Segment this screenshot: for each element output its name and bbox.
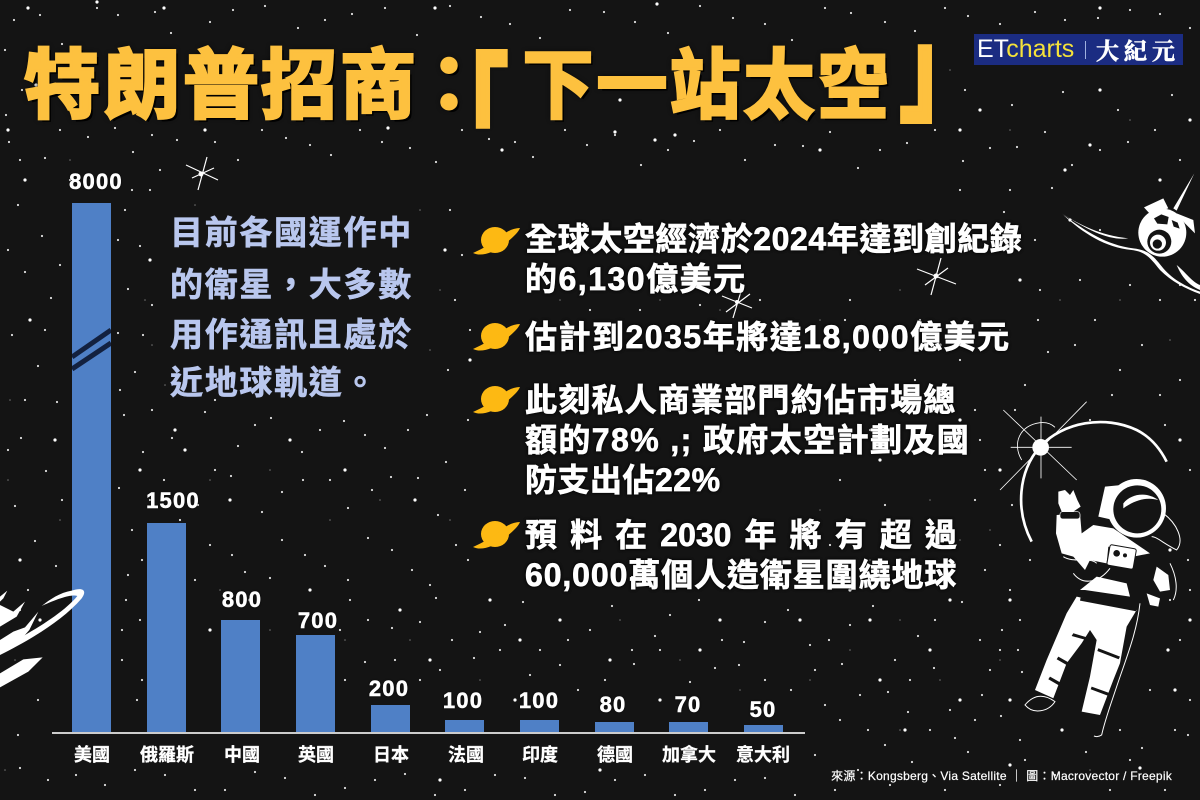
category labels: 日本	[373, 745, 409, 765]
title	[24, 7, 983, 175]
title: 」	[900, 7, 983, 135]
value labels: 50	[750, 697, 776, 722]
bullet text: market size 2024: 的6,130億美元	[525, 261, 747, 297]
category labels: 俄羅斯	[140, 745, 194, 765]
bullet text: private sector share: 此刻私人商業部門約佔市場總	[525, 382, 957, 418]
value labels: 8000	[69, 169, 123, 194]
bullet text: satellites by 2030: 60,000萬個人造衛星圍繞地球	[525, 557, 957, 593]
chart annotation text: 目前各國運作中	[170, 214, 413, 251]
bar chart: satellites by country	[52, 203, 805, 734]
title: 招	[261, 44, 337, 129]
logo: ET charts and Epoch Times	[974, 34, 1183, 65]
chart annotation text: 近地球軌道。	[170, 364, 378, 401]
logo: ET charts and Epoch Times: ETcharts	[977, 35, 1074, 63]
chart annotation text: 的衛星，大多數	[170, 266, 413, 303]
category labels: 法國	[448, 745, 484, 765]
chart annotation text: 用作通訊且處於	[170, 316, 413, 353]
value labels: 70	[675, 692, 701, 717]
value labels: 80	[600, 692, 626, 717]
bar: China 800	[221, 620, 260, 732]
bullet text: forecast 2035: 估計到2035年將達18,000億美元	[525, 319, 1011, 355]
bullet text: market size 2024	[525, 221, 1022, 297]
source credit: 來源：Kongsberg、Via Satellite ｜ 圖：Macrovector / Freepik	[831, 769, 1172, 783]
bullet text: private sector share: 額的78% ,; 政府太空計劃及國	[525, 422, 970, 458]
bar: Italy 50	[744, 725, 783, 732]
category labels: 中國	[224, 745, 260, 765]
category labels: 印度	[522, 745, 558, 765]
title: 站	[670, 44, 740, 129]
category labels: 加拿大	[662, 745, 716, 765]
bar: USA 8000	[72, 203, 111, 732]
logo: ET charts and Epoch Times: 大紀元	[1096, 33, 1180, 66]
category labels: 意大利	[736, 745, 790, 765]
title: 商	[340, 44, 416, 129]
value labels: 800	[222, 587, 262, 612]
bar: UK 700	[296, 635, 335, 732]
bullet text: private sector share	[525, 382, 970, 498]
bar: Germany 80	[595, 722, 634, 732]
value labels: 100	[519, 688, 559, 713]
value labels: 1500	[146, 488, 200, 513]
bar: India 100	[520, 720, 559, 732]
value labels: 100	[443, 688, 483, 713]
bullet text: satellites by 2030	[525, 517, 957, 593]
title: 空	[818, 44, 888, 129]
title: 特	[24, 44, 100, 129]
title: 一	[597, 44, 667, 129]
category labels: 美國	[74, 745, 110, 765]
bullet text: market size 2024: 全球太空經濟於2024年達到創紀錄	[525, 221, 1022, 257]
bar: Japan 200	[371, 705, 410, 732]
bar: Russia 1500	[147, 523, 186, 732]
title: 普	[183, 44, 259, 129]
title: ：	[411, 44, 487, 129]
axis line	[52, 732, 805, 734]
category labels: 英國	[298, 745, 334, 765]
bar: Canada 70	[669, 722, 708, 732]
value labels: 200	[369, 676, 409, 701]
title: 太	[744, 44, 814, 129]
title: 「	[425, 47, 508, 175]
category labels: 德國	[597, 745, 633, 765]
bullet text: satellites by 2030: 預 料 在 2030 年 將 有 超 過	[525, 517, 957, 553]
title: 朗	[104, 44, 180, 129]
bar: France 100	[445, 720, 484, 732]
title: 下	[523, 44, 593, 129]
value labels: 700	[298, 608, 338, 633]
bullet text: private sector share: 防支出佔22%	[525, 462, 721, 498]
